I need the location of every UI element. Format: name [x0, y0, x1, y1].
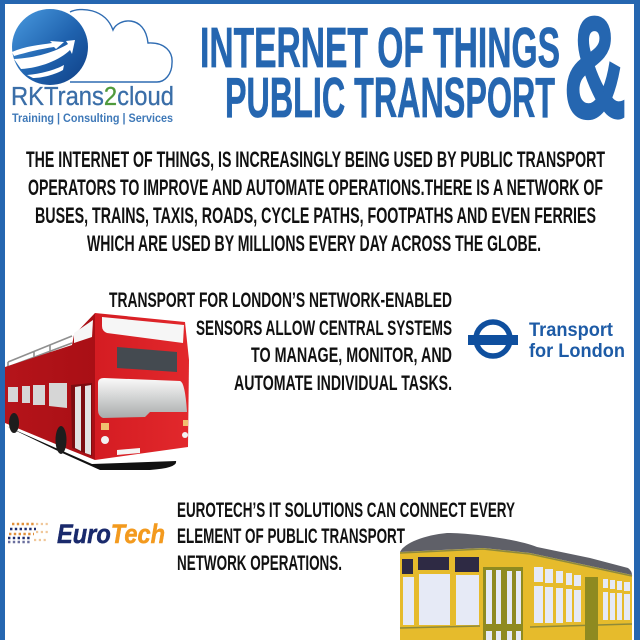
tram rear door	[585, 577, 598, 640]
bus upper side window	[74, 320, 93, 343]
bus upper front window	[102, 317, 184, 343]
bus side windows	[8, 383, 67, 408]
logo: EuroTech	[8, 519, 165, 549]
logo tagline: Training | Consulting | Services	[12, 111, 173, 125]
bus door	[71, 383, 92, 456]
TfL wordmark: Transport	[529, 320, 614, 341]
icon: globe with arrows	[12, 9, 88, 85]
icon: yellow tram	[400, 533, 632, 640]
intro paragraph	[26, 147, 605, 256]
logo: Transport for London	[468, 320, 625, 362]
EuroTech text: NETWORK OPERATIONS.	[177, 552, 342, 575]
bus lights and number plate	[101, 423, 109, 430]
tram roof	[400, 533, 632, 575]
EuroTech text	[177, 499, 515, 575]
tram body	[400, 548, 632, 640]
Transport for London text: TRANSPORT FOR LONDON’S NETWORK-ENABLED	[109, 289, 452, 312]
Transport for London text: AUTOMATE INDIVIDUAL TASKS.	[234, 372, 452, 395]
bus shadow	[6, 426, 176, 470]
logo: RKTrans2cloud	[11, 9, 174, 125]
Transport for London text: SENSORS ALLOW CENTRAL SYSTEMS	[196, 317, 452, 340]
logo: Transport for London: for London	[529, 341, 625, 362]
bus destination display	[117, 347, 177, 372]
bus front body	[95, 313, 189, 460]
EuroTech text: ELEMENT OF PUBLIC TRANSPORT	[177, 525, 405, 548]
icon: roundel	[468, 322, 518, 356]
tram dark upper windows	[402, 557, 479, 574]
icon: dot grid	[8, 524, 50, 542]
bus railing	[8, 336, 72, 370]
bus side body	[5, 313, 95, 460]
bus wheels	[9, 413, 19, 433]
tram rear windows	[603, 579, 630, 620]
icon: red double-decker bus	[5, 313, 189, 470]
tram lower front windows	[403, 574, 479, 625]
bus front windscreen	[98, 378, 187, 418]
icon: cloud outline	[70, 10, 172, 82]
title	[200, 0, 626, 148]
Transport for London text	[109, 289, 452, 395]
tram side windows	[534, 567, 581, 623]
EuroTech wordmark: EuroTech	[57, 519, 165, 549]
Transport for London text: TO MANAGE, MONITOR, AND	[251, 344, 452, 367]
tram olive trim	[400, 549, 632, 628]
tram door	[483, 567, 523, 640]
logo wordmark: RKTrans2cloud	[11, 83, 174, 111]
